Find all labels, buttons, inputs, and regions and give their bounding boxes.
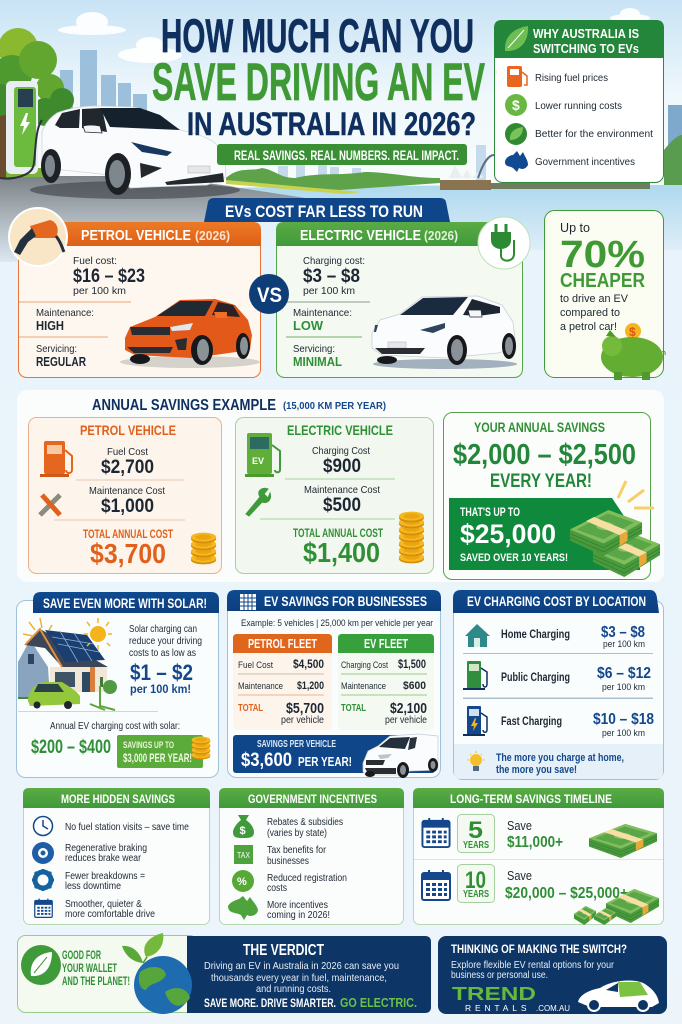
panel heading: ELECTRIC VEHICLE: [300, 227, 421, 244]
card: electric costs: $900: [323, 456, 361, 477]
icon: leaf badge: [21, 945, 61, 985]
panel: more hidden savings: less downtime: [65, 881, 121, 892]
panel: more hidden savings: Fewer breakdowns =: [65, 871, 145, 882]
panel: electric vehicle: [276, 217, 530, 378]
row: 5 years: $11,000+: [507, 834, 563, 851]
fuel cost: [73, 255, 145, 297]
table: petrol fleet: $5,700: [286, 700, 324, 717]
skyline: [60, 50, 682, 184]
row: 5 years: [422, 814, 657, 858]
row: public charging: Public Charging: [501, 670, 570, 684]
icon: dollar coin: $: [512, 97, 520, 113]
maintenance: Maintenance:: [36, 307, 94, 319]
card: the verdict: and running costs.: [256, 983, 331, 995]
table: petrol fleet: TOTAL: [238, 702, 263, 714]
panel: government incentives: Reduced registration: [267, 873, 347, 884]
card: petrol costs: $2,700: [101, 457, 154, 478]
card: good for your wallet and the planet: AND THE PLANET!: [62, 976, 130, 988]
card: thinking of making the switch: Explore flexible EV rental options for your: [451, 960, 615, 971]
icon: EV pump: EV: [252, 456, 264, 466]
card: good for your wallet and the planet: YOUR WALLET: [62, 963, 117, 975]
card: the verdict: SAVE MORE. DRIVE SMARTER.: [204, 998, 336, 1010]
servicing: REGULAR: [36, 354, 86, 369]
logo: Trend Rentals: [452, 984, 570, 1013]
panel: EV savings for businesses: EV SAVINGS FOR BUSINESSES: [264, 594, 427, 609]
tagline pill: REAL SAVINGS. REAL NUMBERS. REAL IMPACT.: [234, 147, 459, 163]
callout: 10 year savings: [449, 498, 640, 570]
panel: 70% cheaper: compared to: [560, 307, 620, 319]
icon: brake disc: [32, 842, 54, 864]
section heading: (15,000 KM PER YEAR): [283, 401, 386, 412]
card: your annual savings: $2,000 – $2,500: [453, 439, 636, 471]
clouds: [58, 8, 650, 63]
icon: rays: [618, 481, 654, 508]
table: petrol fleet: $4,500: [293, 659, 324, 671]
maintenance: [293, 307, 352, 333]
table: petrol fleet: $1,200: [297, 680, 324, 692]
panel: more hidden savings: MORE HIDDEN SAVINGS: [61, 792, 175, 806]
servicing: Servicing:: [36, 343, 77, 355]
panel: government incentives: Rebates & subsidies: [267, 817, 343, 828]
panel: more hidden savings: [23, 788, 210, 924]
icon: cash stacks: [570, 510, 660, 577]
card: thinking of making the switch: THINKING OF MAKING THE SWITCH?: [451, 944, 627, 956]
VS badge: [249, 274, 289, 314]
banner: EVs cost far less to run: [204, 198, 450, 222]
panel: save more with solar: Annual EV charging cost with solar:: [50, 721, 180, 732]
icon: piggy bank: $: [629, 325, 636, 339]
tagline pill: [217, 144, 467, 165]
table: petrol fleet: [233, 634, 332, 730]
title: HOW MUCH CAN YOU: [161, 9, 474, 62]
charging cost: Charging cost:: [303, 255, 365, 267]
solar copy: reduce your driving: [129, 635, 202, 647]
logo: Trend Rentals: TREND: [452, 984, 536, 1004]
icon: logo car: [578, 981, 659, 1011]
table: petrol fleet: Maintenance: [238, 681, 283, 692]
icon: plug: [478, 217, 530, 269]
card: the verdict: thousands every year in fuel, maintenance,: [211, 972, 387, 984]
section heading: ANNUAL SAVINGS EXAMPLE: [92, 397, 276, 414]
panel: 70% cheaper: CHEAPER: [560, 270, 645, 292]
maintenance: HIGH: [36, 318, 64, 333]
icon: fuel pump: [507, 66, 527, 87]
row: public charging: [501, 665, 651, 693]
servicing: Servicing:: [293, 343, 335, 355]
orange SUV: [120, 299, 260, 368]
icon: money bag: [233, 815, 254, 838]
panel: government incentives: GOVERNMENT INCENTIVES: [248, 792, 377, 806]
panel: long-term savings timeline: [413, 788, 664, 925]
icon: solar house with car: [18, 618, 158, 712]
card: electric costs: Charging Cost: [312, 445, 370, 457]
icon: dollar coin: [505, 94, 527, 116]
panel heading: (2026): [424, 228, 458, 243]
panel: EV savings for businesses: [227, 590, 441, 778]
row: 10 years: $20,000 – $25,000+: [505, 885, 628, 902]
panel: government incentives: businesses: [267, 856, 309, 867]
row: public charging: per 100 km: [602, 682, 645, 693]
row: fast charging: $10 – $18: [593, 711, 654, 728]
tip text: The more you charge at home,: [496, 752, 624, 764]
panel: government incentives: coming in 2026!: [267, 910, 330, 921]
panel: petrol vehicle: [9, 208, 261, 378]
white van: [363, 734, 438, 778]
maintenance: LOW: [293, 318, 324, 333]
banner: EVs cost far less to run: EVs COST FAR LESS TO RUN: [225, 202, 423, 221]
row: 10 years: [422, 864, 659, 925]
icon: gear: [32, 869, 54, 891]
panel: more hidden savings: No fuel station visits – save time: [65, 822, 189, 833]
icon: fuel nozzle: [9, 208, 67, 266]
panel: save more with solar: $200 – $400: [31, 737, 111, 758]
icon: calendar: [35, 899, 52, 917]
card: petrol costs: PETROL VEHICLE: [80, 422, 176, 438]
sydney opera house and bridge: [440, 155, 650, 190]
white car: [30, 106, 240, 199]
callout: savings per vehicle: SAVINGS PER VEHICLE: [257, 739, 336, 750]
solar copy: per 100 km!: [130, 684, 191, 696]
icon: tax: TAX: [237, 850, 250, 860]
callout: 10 year savings: SAVED OVER 10 YEARS!: [460, 552, 568, 564]
callout: solar savings: SAVINGS UP TO: [123, 740, 174, 751]
table: EV fleet: TOTAL: [341, 702, 366, 714]
table: petrol fleet: per vehicle: [281, 715, 324, 726]
row: 5 years: YEARS: [463, 840, 489, 851]
row: home charging: per 100 km: [603, 639, 645, 650]
callout: savings per vehicle: PER YEAR!: [298, 755, 352, 769]
icon: green leaf: [505, 123, 527, 145]
card: petrol costs: [28, 418, 222, 574]
title: [152, 9, 485, 142]
panel: EV savings for businesses: Example: 5 vehicles | 25,000 km per vehicle per year: [241, 618, 433, 628]
callout: 10 year savings: THAT'S UP TO: [460, 507, 520, 519]
card: electric costs: $500: [323, 495, 361, 516]
icon: petrol pump: [40, 441, 72, 477]
row: 10 years: 10: [465, 867, 486, 894]
tip text: the more you save!: [496, 764, 577, 776]
row: home charging: [501, 624, 645, 650]
charging station: [0, 81, 42, 179]
card: electric costs: $1,400: [303, 537, 380, 568]
card: thinking of making the switch: business or personal use.: [451, 970, 548, 981]
table: EV fleet: per vehicle: [385, 715, 427, 726]
row: 10 years: Save: [507, 869, 532, 883]
icon: tax: [234, 845, 253, 864]
panel: government incentives: More incentives: [267, 900, 328, 911]
fuel cost: Fuel cost:: [73, 255, 117, 267]
VS badge: VS: [257, 284, 282, 307]
icon: public charger: [463, 661, 487, 690]
icon: leaf: [505, 26, 528, 51]
row: public charging: $6 – $12: [597, 665, 651, 682]
road: [0, 176, 345, 262]
card: the verdict: GO ELECTRIC.: [340, 996, 417, 1010]
row: 5 years: 5: [468, 817, 483, 844]
panel: 70% cheaper: Up to: [560, 220, 590, 235]
card: petrol costs: $3,700: [90, 538, 166, 569]
panel: 70% cheaper: 70%: [560, 234, 645, 276]
table: EV fleet: [338, 634, 434, 730]
servicing: [36, 343, 86, 369]
table: petrol fleet: PETROL FLEET: [248, 637, 317, 651]
solar copy: costs to as low as: [129, 647, 196, 659]
solar copy: Solar charging can: [129, 623, 197, 635]
icon: coin stack: [399, 512, 424, 563]
card: petrol costs: $1,000: [101, 496, 154, 517]
icon: piggy bank: [601, 323, 665, 380]
icon: EV pump: [245, 433, 280, 477]
table: EV fleet: EV FLEET: [364, 637, 408, 651]
panel: government incentives: Tax benefits for: [267, 845, 327, 856]
item: lower running costs: Lower running costs: [535, 101, 622, 112]
tip text: [496, 752, 624, 776]
card: electric costs: [236, 418, 434, 574]
white electric car: [372, 296, 517, 369]
row: fast charging: per 100 km: [602, 728, 645, 739]
row: fast charging: [501, 711, 654, 739]
icon: wrench: [246, 488, 271, 516]
callout: savings per vehicle: [233, 735, 435, 773]
icon: light bulb: [467, 751, 485, 771]
panel: save more with solar: SAVE EVEN MORE WITH SOLAR!: [43, 596, 207, 611]
row: home charging: Home Charging: [501, 627, 570, 641]
card: thinking of making the switch: [438, 936, 667, 1014]
panel: government incentives: (varies by state): [267, 828, 327, 839]
charging cost: per 100 km: [303, 285, 355, 297]
table: EV fleet: Charging Cost: [341, 660, 388, 671]
fuel cost: per 100 km: [73, 285, 126, 297]
icon: coin stack: [191, 533, 216, 564]
water: [230, 185, 682, 250]
card: petrol costs: TOTAL ANNUAL COST: [83, 529, 173, 541]
callout: solar savings: [117, 735, 210, 768]
panel: 70% cheaper: a petrol car!: [560, 321, 617, 333]
shoreline trees: [226, 168, 440, 190]
item: better for the environment: Better for the environment: [535, 129, 653, 140]
table: EV fleet: $600: [403, 680, 426, 692]
fuel cost: $16 – $23: [73, 266, 145, 287]
panel heading: WHY AUSTRALIA IS: [533, 27, 639, 41]
panel: government incentives: costs: [267, 883, 287, 894]
item: government incentives: Government incentives: [535, 157, 635, 168]
icon: home: [465, 624, 490, 647]
icon: fast charger: [463, 706, 487, 736]
card: the verdict: [187, 936, 431, 1013]
row: 10 years: YEARS: [463, 889, 489, 900]
card: electric costs: ELECTRIC VEHICLE: [287, 422, 393, 438]
callout: savings per vehicle: $3,600: [241, 750, 292, 771]
icon: tools: [40, 495, 60, 515]
icon: earth with sprout: [122, 933, 192, 1014]
card: petrol costs: Fuel Cost: [107, 446, 148, 458]
card: the verdict: Driving an EV in Australia in 2026 can save you: [204, 960, 399, 972]
table: EV fleet: $1,500: [398, 659, 426, 671]
card: good for your wallet and the planet: GOOD FOR: [62, 950, 101, 962]
icon: Australia map: [505, 151, 528, 172]
charging cost: [303, 255, 365, 297]
icon: coins: [192, 736, 210, 760]
icon: percent: [232, 870, 254, 892]
solar copy: [129, 623, 202, 696]
item: rising fuel prices: Rising fuel prices: [535, 73, 608, 84]
panel heading: (2026): [195, 228, 230, 243]
icon: percent: %: [237, 876, 247, 888]
hero illustration: [0, 0, 682, 262]
panel: long-term savings timeline: LONG-TERM SAVINGS TIMELINE: [450, 792, 612, 806]
charging cost: $3 – $8: [303, 266, 360, 287]
card: the verdict: THE VERDICT: [243, 942, 324, 959]
panel: more hidden savings: Regenerative braking: [65, 843, 147, 854]
servicing: [293, 343, 342, 369]
card: good for your wallet and the planet: [18, 936, 198, 1012]
title: IN AUSTRALIA IN 2026?: [187, 106, 476, 142]
tip band background: [454, 744, 663, 779]
card: your annual savings: EVERY YEAR!: [490, 471, 592, 492]
maintenance: [36, 307, 94, 333]
panel: more hidden savings: reduces brake wear: [65, 853, 142, 864]
servicing: MINIMAL: [293, 354, 342, 369]
logo: Trend Rentals: RENTALS: [465, 1003, 530, 1013]
card: your annual savings: YOUR ANNUAL SAVINGS: [474, 420, 605, 435]
card: electric costs: Maintenance Cost: [304, 484, 380, 496]
panel: more hidden savings: more comfortable drive: [65, 909, 155, 920]
table: petrol fleet: Fuel Cost: [238, 660, 273, 671]
row: home charging: $3 – $8: [601, 624, 645, 641]
icon: clock: [34, 816, 52, 836]
solar copy: $1 – $2: [130, 660, 193, 685]
row: 5 years: Save: [507, 819, 532, 833]
card: petrol costs: Maintenance Cost: [89, 485, 165, 497]
panel heading: PETROL VEHICLE: [81, 227, 191, 244]
card: electric costs: TOTAL ANNUAL COST: [293, 528, 383, 540]
panel: save more with solar: [16, 592, 219, 778]
panel: 70% cheaper: to drive an EV: [560, 293, 629, 305]
tree: [0, 28, 74, 178]
callout: solar savings: $3,000 PER YEAR!: [123, 751, 192, 765]
hillside right: [664, 135, 682, 185]
panel: why Australia is switching: [494, 20, 664, 182]
panel: 70% cheaper: [544, 210, 665, 380]
panel: more hidden savings: Smoother, quieter &: [65, 899, 142, 910]
logo: Trend Rentals: .COM.AU: [536, 1004, 570, 1013]
icon: Australia: [228, 896, 258, 920]
row: fast charging: Fast Charging: [501, 714, 562, 728]
card: your annual savings: [444, 412, 660, 580]
panel: annual savings example: [17, 390, 664, 582]
maintenance: Maintenance:: [293, 307, 352, 319]
panel heading: SWITCHING TO EVs: [533, 42, 639, 56]
table: EV fleet: Maintenance: [341, 681, 386, 692]
panel: charging cost by location: [453, 590, 664, 780]
table: EV fleet: $2,100: [390, 700, 427, 717]
icon: office building: [240, 594, 256, 610]
panel: government incentives: [219, 788, 404, 924]
icon: money bag: $: [240, 825, 246, 837]
callout: 10 year savings: $25,000: [460, 519, 556, 549]
panel heading: [533, 27, 639, 56]
